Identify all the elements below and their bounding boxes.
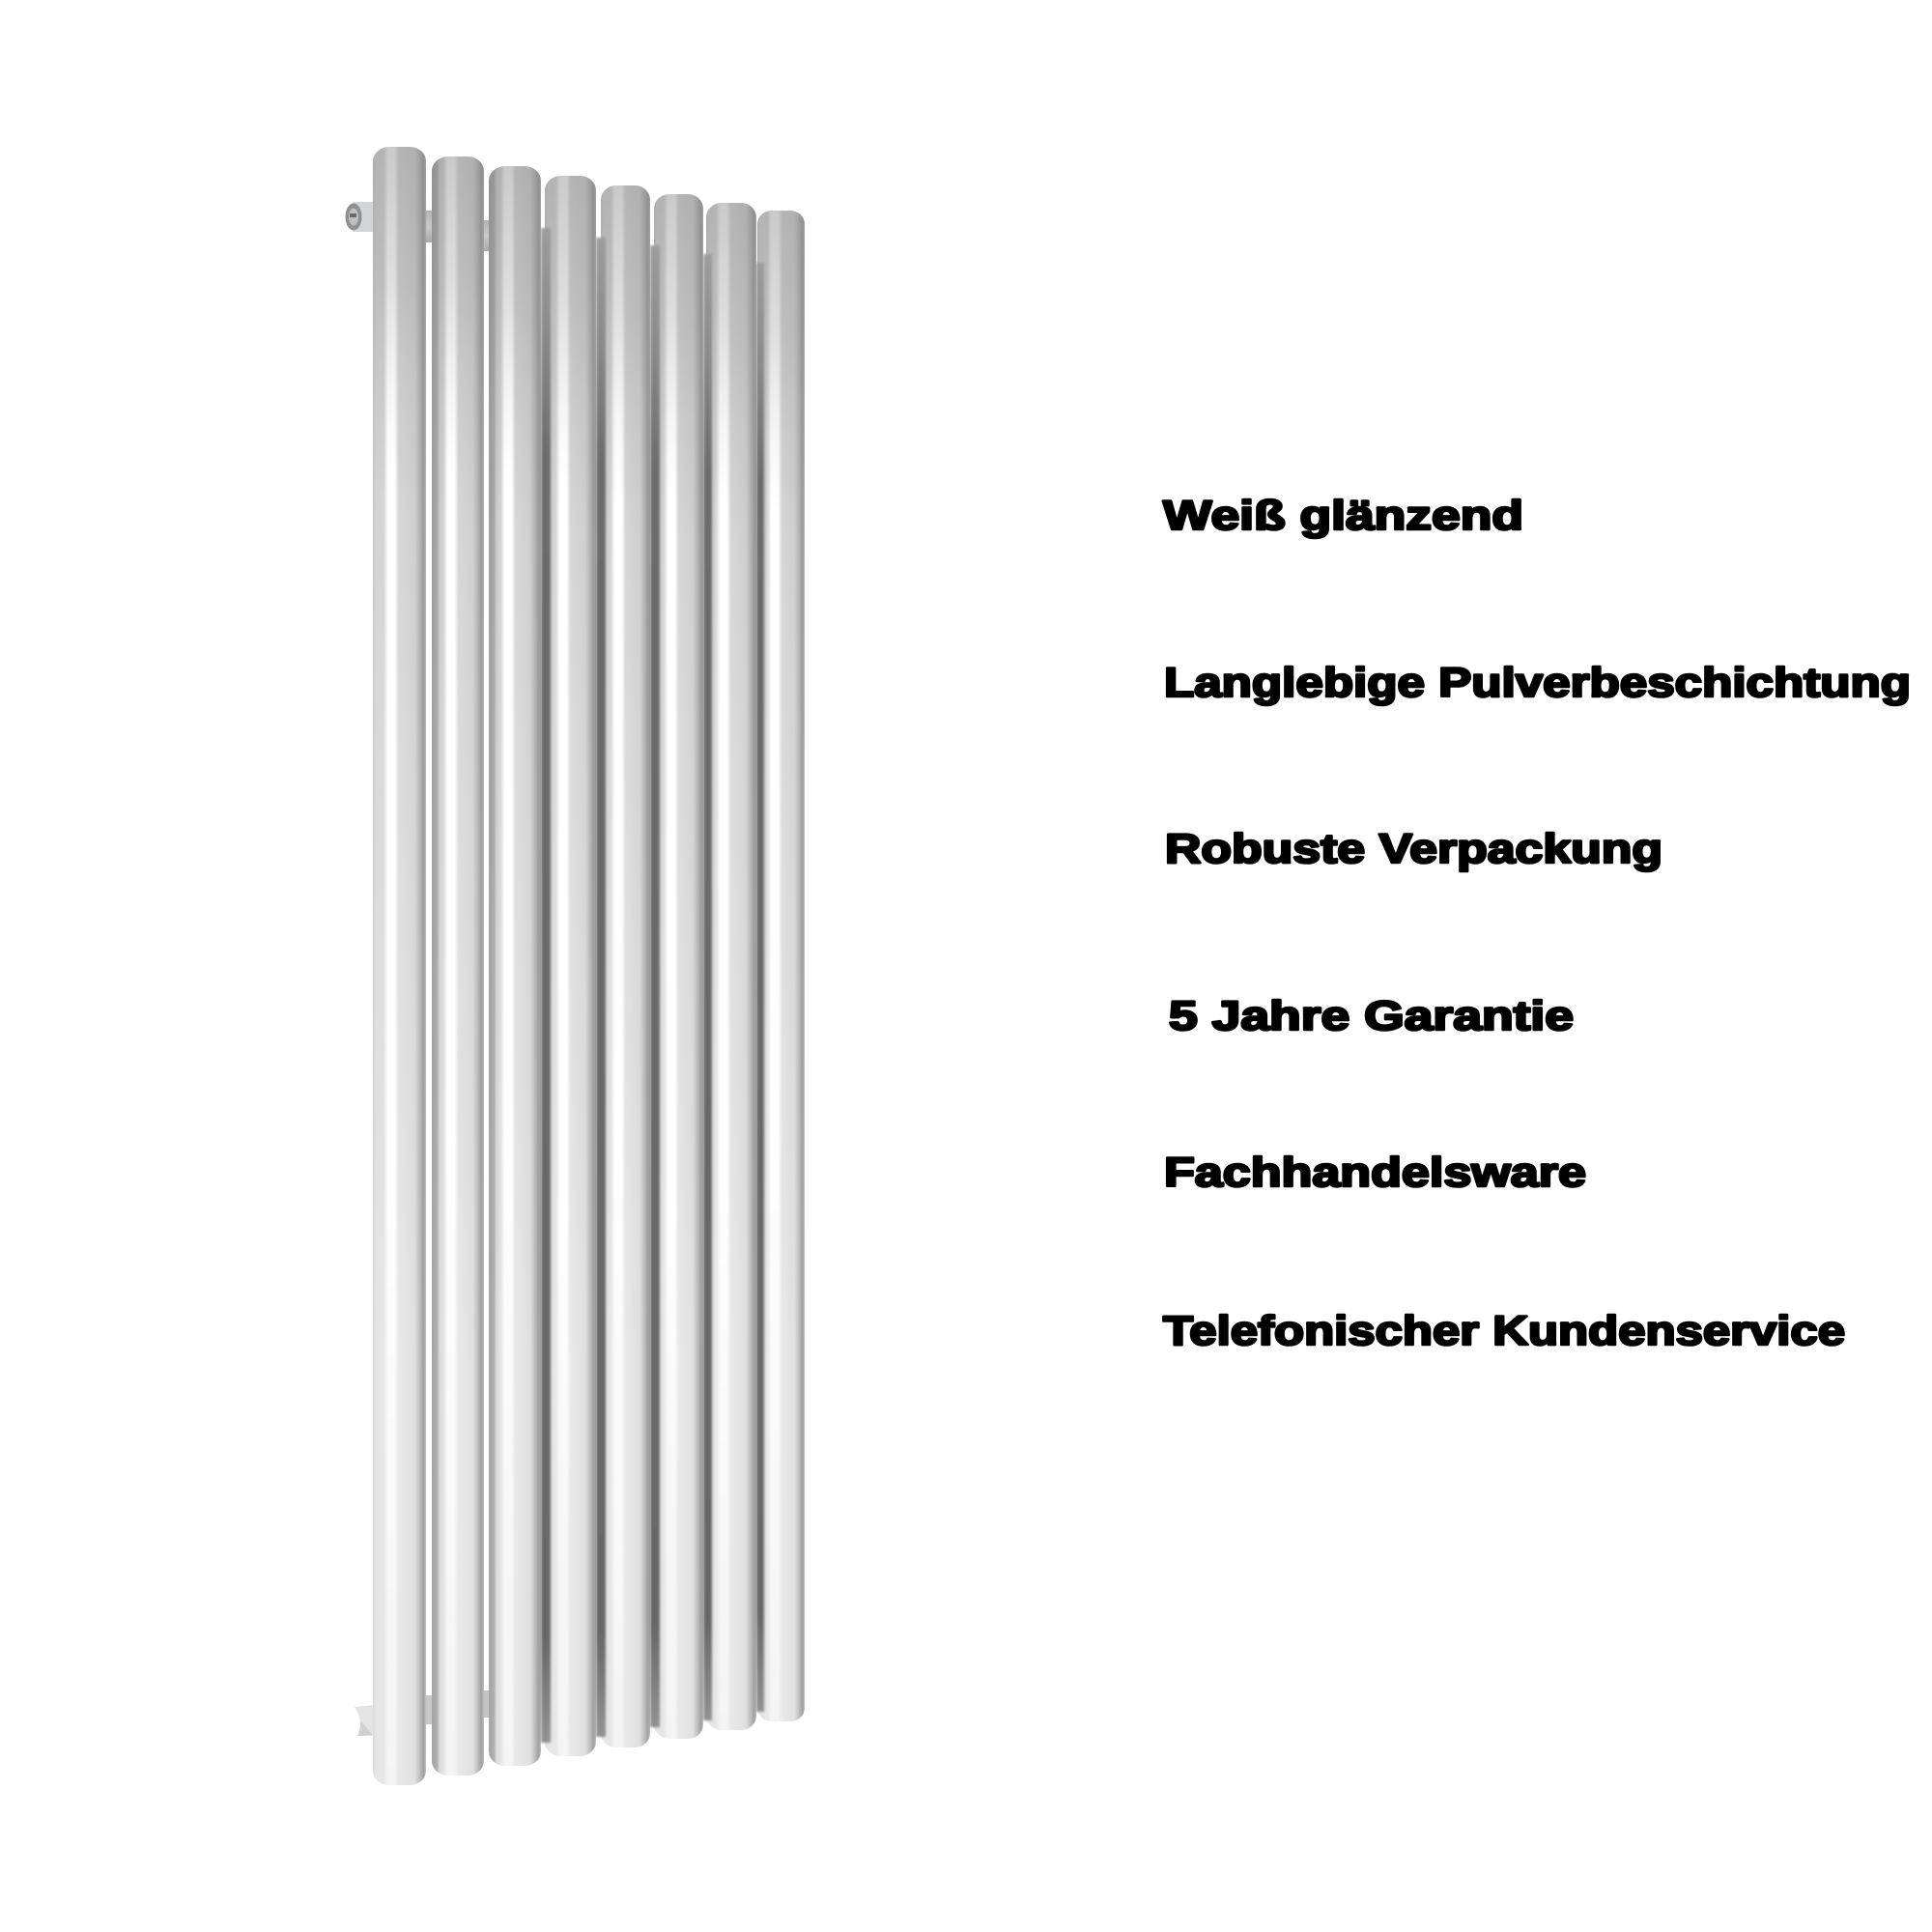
feature: 5 Jahre Garantie: 5 Jahre Garantie (1169, 993, 1574, 1039)
icon: upper valve (346, 202, 375, 232)
tube 4 (541, 176, 596, 1756)
feature: Robuste Verpackung: Robuste Verpackung (1165, 826, 1662, 872)
icon: lower pipe (355, 1705, 375, 1736)
tube 6 (650, 194, 703, 1739)
radiator illustration (346, 147, 805, 1785)
tube 3 (489, 166, 541, 1766)
feature: Weiß glänzend: Weiß glänzend (1163, 493, 1523, 539)
feature list (1163, 493, 1911, 1354)
connectors between front tubes (425, 211, 490, 1724)
tube 8 (756, 211, 805, 1721)
tube 1 (373, 147, 426, 1785)
feature: Langlebige Pulverbeschichtung: Langlebige Pulverbeschichtung (1164, 660, 1911, 706)
tube 5 (596, 185, 650, 1747)
feature: Fachhandelsware: Fachhandelsware (1164, 1150, 1586, 1196)
feature: Telefonischer Kundenservice: Telefonischer Kundenservice (1163, 1308, 1845, 1354)
tube 2 (432, 156, 484, 1776)
tube 7 (703, 203, 756, 1730)
